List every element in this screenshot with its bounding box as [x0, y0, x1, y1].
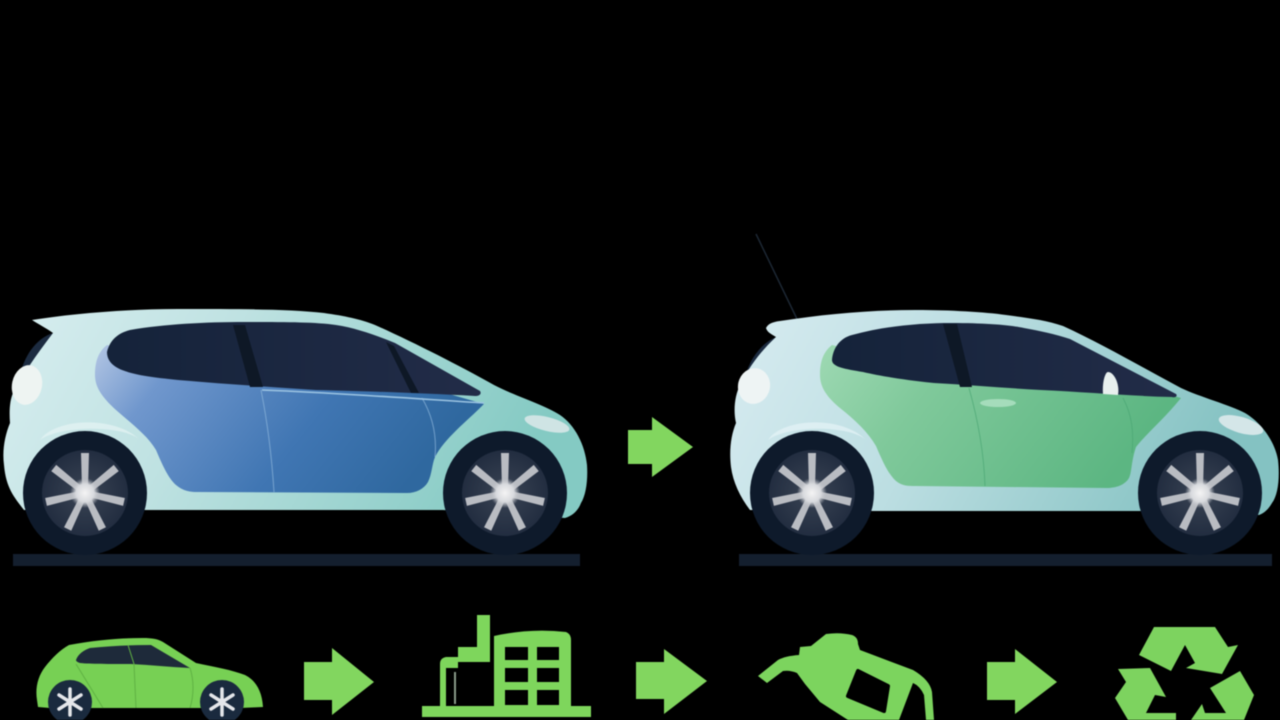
head light	[1217, 411, 1265, 439]
tail light	[8, 362, 46, 408]
icon: fuel pump	[758, 633, 934, 720]
recycle arrow right	[1191, 671, 1254, 720]
rear wheel	[23, 431, 147, 555]
window pillar	[943, 324, 972, 387]
antenna	[756, 234, 797, 319]
head light	[523, 412, 571, 436]
blue car body	[3, 309, 587, 518]
blue car window	[107, 322, 481, 396]
recycle arrow top	[1139, 627, 1238, 674]
arrow 3	[987, 649, 1057, 714]
green door panel	[820, 345, 1181, 488]
icon: factory	[422, 615, 591, 717]
door handle	[980, 399, 1016, 407]
wheel arch highlight	[40, 422, 140, 440]
tail light	[735, 365, 773, 407]
door seams	[969, 388, 1133, 486]
front wheel	[443, 431, 567, 555]
road shadow under green car	[739, 554, 1272, 566]
arrow 2	[636, 649, 707, 714]
icon: recycle	[1115, 627, 1254, 720]
door top trim	[262, 390, 484, 403]
arrow 1	[304, 648, 374, 715]
wheel arch highlight	[768, 422, 866, 440]
front wheel	[1138, 431, 1262, 555]
green car	[730, 234, 1279, 566]
mirror	[1103, 372, 1118, 395]
door seams	[261, 390, 435, 492]
rear wheel	[750, 431, 874, 555]
blue door panel	[95, 345, 484, 493]
recycle arrow left	[1115, 668, 1176, 720]
green car body	[730, 310, 1279, 515]
window pillars	[233, 325, 419, 393]
top arrow	[628, 417, 693, 477]
rear glass sliver	[20, 333, 53, 374]
green car window	[832, 323, 1177, 397]
rear glass sliver	[745, 337, 776, 377]
road shadow under blue car	[13, 554, 580, 566]
blue car	[3, 309, 587, 566]
icon: small green car	[36, 638, 263, 720]
